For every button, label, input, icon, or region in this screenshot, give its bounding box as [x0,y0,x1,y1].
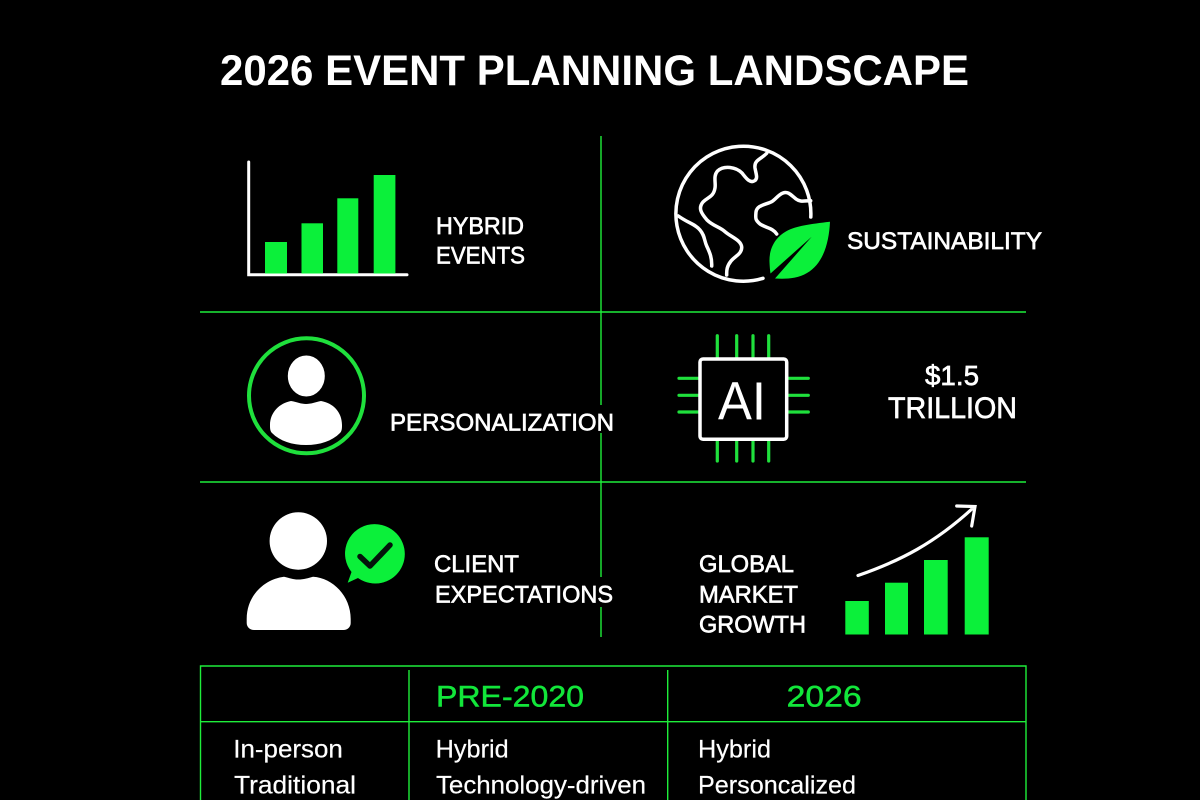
table column: pre-2020: Technology-driven [436,771,646,799]
table column: row labels: In-person [233,735,343,763]
label: hybrid events [436,213,525,270]
panel: sustainability [676,146,1042,281]
label: global market growth: MARKET [699,582,798,609]
label: client expectations: CLIENT [434,551,519,578]
icon: AI chip [679,336,808,461]
label: client expectations: EXPECTATIONS [435,582,613,609]
label: personalization: PERSONALIZATION [390,410,614,436]
label: sustainability: SUSTAINABILITY [847,228,1042,255]
table header: pre-2020: PRE-2020 [436,681,584,714]
comparison table [200,666,1026,800]
panel: personalization [249,338,614,453]
label: hybrid events: HYBRID [436,213,524,240]
stat: $1.5 trillion: $1.5 [925,360,979,391]
panel: AI [679,336,1017,461]
table column: row labels: Traditional [234,771,356,799]
table header: 2026: 2026 [787,681,862,714]
icon: person in circle [249,338,364,453]
table grid [200,666,1026,800]
icon: globe with leaf [676,146,830,281]
table column: 2026: Personcalized [698,771,856,799]
label: hybrid events: EVENTS [436,242,525,270]
panel: hybrid events [249,162,525,275]
panel: client expectations [247,512,613,630]
grid lines [200,136,1026,637]
table column: pre-2020 [436,735,646,799]
label: client expectations [434,551,613,609]
stat: $1.5 trillion: TRILLION [888,392,1017,425]
table column: row labels [233,735,356,799]
icon: growth bars with arrow [845,506,989,634]
table column: 2026 [698,735,856,799]
title: 2026 EVENT PLANNING LANDSCAPE [220,48,969,95]
icon: client with check bubble [247,512,405,630]
label: global market growth [699,551,806,639]
table column: pre-2020: Hybrid [436,735,509,763]
panel: global market growth [699,506,989,639]
icon: AI chip: AI [718,371,766,431]
icon: hybrid events bar chart [249,162,407,275]
label: global market growth: GROWTH [699,612,806,639]
table column: 2026: Hybrid [698,735,771,763]
stat: $1.5 trillion [888,360,1017,425]
label: global market growth: GLOBAL [699,551,794,578]
